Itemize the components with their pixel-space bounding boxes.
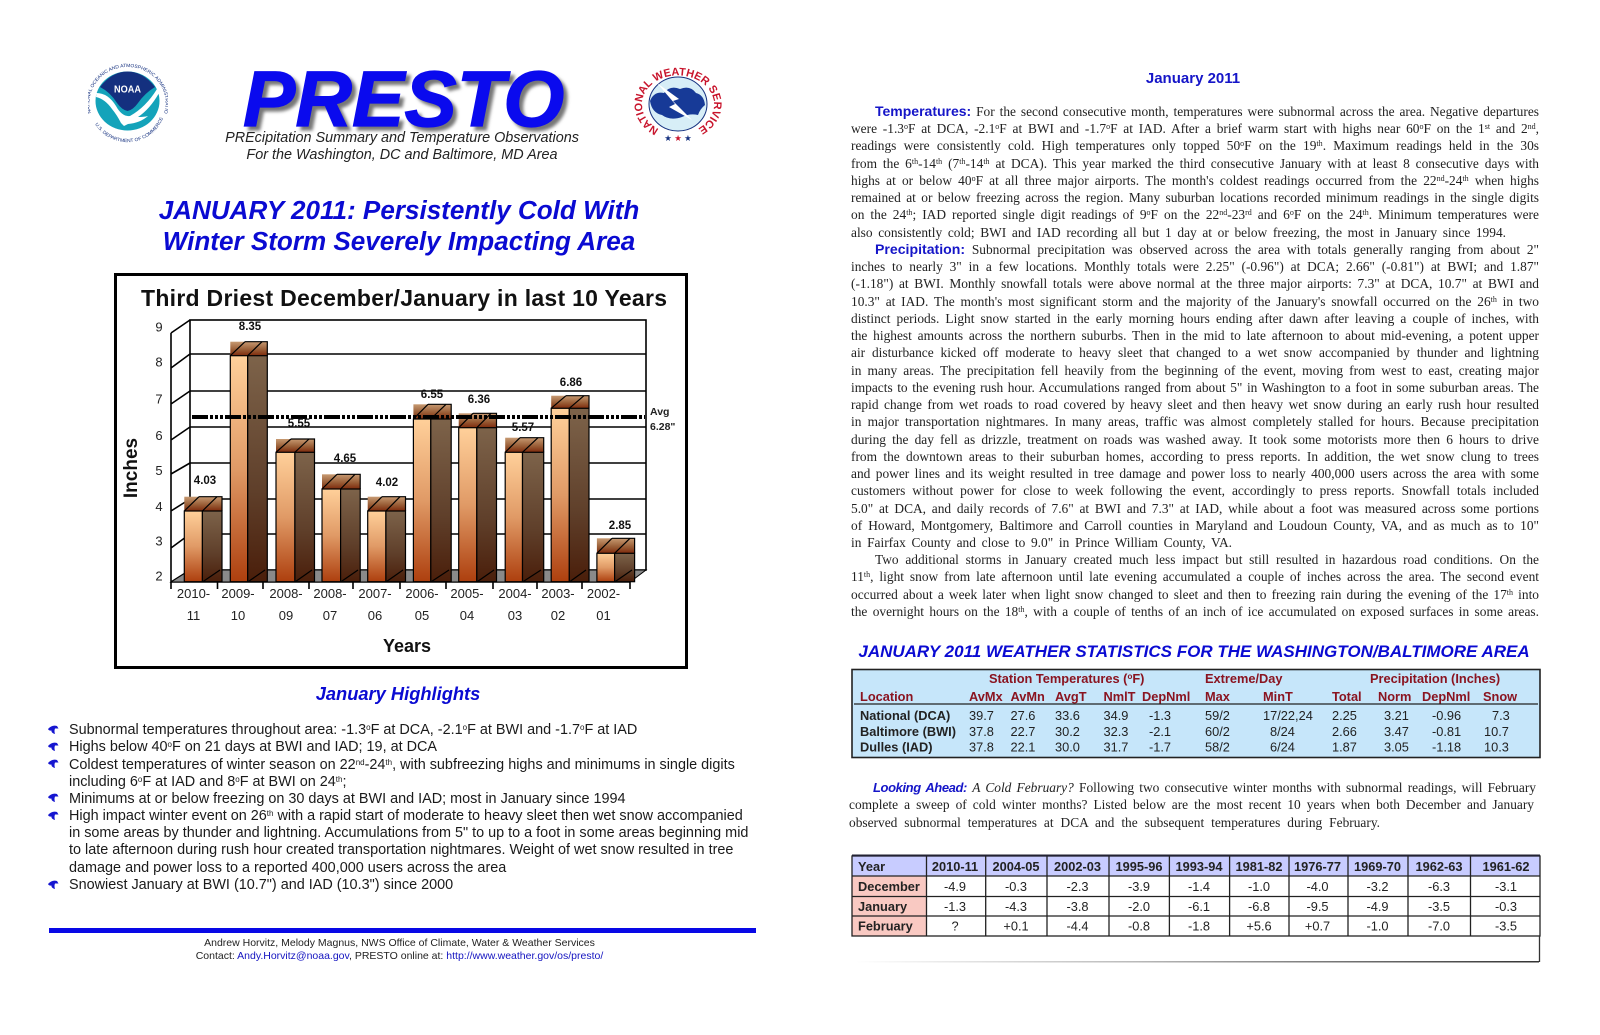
row: Dulles: 31.7 (1104, 740, 1128, 754)
row: Baltimore: -0.81 (1432, 724, 1461, 739)
row: National: -0.96 (1432, 708, 1461, 723)
value labels: 2.85 (609, 520, 632, 532)
x axis labels: 07 (323, 608, 337, 623)
x axis labels (177, 586, 620, 623)
row: National: 7.3 (1492, 708, 1510, 723)
headline: JANUARY 2011: Persistently Cold With (159, 195, 639, 225)
article text: of Howard, Montgomery, Baltimore and Carroll counties in Maryland and Loudoun County, VA, and as much as to 10" (851, 518, 1539, 533)
group headers: F) (1132, 671, 1144, 686)
y axis labels: 5 (155, 463, 163, 478)
row: December: -1.0 (1248, 879, 1270, 894)
heading: January Highlights: January Highlights (316, 683, 480, 704)
chart title: Third Driest December/January in last 10 Years (141, 285, 667, 311)
column headers: Max (1205, 689, 1231, 704)
row: December: -4.0 (1306, 879, 1329, 894)
looking ahead text: complete a sweep of cold winter months? Listed below are the most recent 10 years when both December and January (849, 797, 1534, 812)
row: February: +0.1 (1003, 918, 1029, 934)
row: December: -1.4 (1188, 879, 1210, 894)
article text: inches to nearly 3" in a few locations. Monthly totals were 2.25" (-0.96") at DCA; 2.66" (-0.81") at BWI; and 1.87" (851, 259, 1539, 274)
row: Baltimore: 8/24 (1270, 724, 1295, 739)
article text: distinct periods. Light snow started in the early morning hours ending after dawn after leaving a couple of inches, with (851, 311, 1539, 326)
row: Baltimore: 2.66 (1332, 724, 1357, 739)
bullet icon (48, 812, 58, 820)
row: Dulles: 30.0 (1055, 740, 1080, 754)
row: February: -4.4 (1066, 918, 1089, 934)
bullet list: Snowiest January at BWI (10.7") and IAD (10.3") since 2000 (69, 876, 453, 892)
article text: on the 24th; IAD reported single digit readings of 9oF on the 22nd-23rd and 6oF on the 24th. Minimum temperatures were (851, 207, 1539, 222)
article text: (-1.18") at BWI. Monthly snowfall totals were above normal at the three major airports: 7.3" at DCA, 10.7" at BWI and (851, 276, 1539, 291)
grid and axes (171, 320, 646, 589)
looking ahead text (849, 780, 1536, 830)
row: Dulles: -1.7 (1149, 740, 1171, 754)
y axis labels: 6 (155, 428, 163, 443)
row: Baltimore: 30.2 (1055, 724, 1080, 739)
column headers: AvMx (969, 689, 1004, 704)
row: Dulles: 10.3 (1484, 740, 1509, 754)
bullet list: to late afternoon during rush hour created transportation nightmares. Weight of wet snow resulted in tree (69, 842, 733, 858)
row: December: December (858, 879, 920, 894)
average label: Avg (650, 406, 669, 418)
x axis labels: 09 (279, 608, 293, 623)
article text: air disturbance kicked off moderate to heavy sleet that changed to a wet snow accompanied by thunder and lightning (851, 345, 1539, 360)
headline (159, 195, 639, 256)
value labels: 6.86 (560, 377, 582, 389)
article text: 10.3" at IAD. The month's most significant storm and the majority of the January's snowfall occurred on the 26th in two (851, 294, 1539, 309)
y axis labels: 2 (155, 568, 163, 584)
x axis labels: 2004- (498, 586, 532, 601)
bullet list: Minimums at or below freezing on 30 days at BWI and IAD; most in January since 1994 (69, 790, 626, 806)
row: December: -4.9 (944, 879, 966, 894)
x axis labels: 2008- (313, 586, 347, 601)
row: National: 27.6 (1010, 708, 1035, 723)
bullet list: damage and power loss to a reported 400,000 users across the area (69, 860, 506, 876)
value labels: 6.36 (468, 394, 490, 406)
row: Baltimore: -2.1 (1149, 724, 1171, 739)
column headers: MinT (1263, 689, 1293, 704)
article text: Precipitation: Subnormal precipitation was observed across the area with totals generally ranging from about 2" (875, 241, 1539, 257)
x axis labels: 04 (460, 608, 474, 623)
header row: 1993-94 (1176, 859, 1223, 874)
row: December: -6.3 (1428, 879, 1450, 894)
x axis labels: 2005- (450, 586, 484, 601)
x axis labels: 2009- (221, 586, 255, 601)
article text: impacts to the evening rush hour. Accumulations ranged from about 5" in Washington to a foot in some suburban areas. The (851, 380, 1539, 395)
column headers: DepNml (1142, 689, 1190, 704)
x axis labels: 2002- (587, 586, 620, 601)
subtitle: For the Washington, DC and Baltimore, MD Area (246, 146, 558, 162)
row: January: -1.3 (944, 899, 966, 914)
row: February: +0.7 (1305, 918, 1330, 934)
bullet list: Subnormal temperatures throughout area: -1.3oF at DCA, -2.1oF at BWI and -1.7oF at IAD (69, 722, 637, 738)
bullet list: including 6oF at IAD and 8oF at BWI on 24th; (69, 774, 346, 790)
row: Dulles: Dulles (IAD) (860, 740, 933, 754)
row: Dulles: 3.05 (1384, 740, 1409, 754)
subtitle (225, 130, 579, 162)
x axis labels: 2008- (269, 586, 303, 601)
row: Baltimore (860, 724, 1509, 739)
x axis labels: 01 (596, 608, 611, 623)
row: January: -3.5 (1428, 899, 1450, 914)
row: January: -4.9 (1366, 899, 1389, 914)
header row: 1969-70 (1354, 859, 1401, 874)
bar chart: Third Driest December/January (114, 273, 688, 669)
article text: during the day fell as drizzle, treatment on roads was washed away. It took some motorists more then 6 hours to drive (851, 432, 1539, 447)
column headers: AvgT (1055, 689, 1087, 704)
row: January (858, 899, 1517, 914)
row: National: 59/2 (1205, 708, 1230, 723)
article text: from the downtown areas to their suburban homes, according to press reports. In addition, the wet snow clung to trees (851, 449, 1539, 464)
header row: 2010-11 (932, 859, 978, 874)
column headers: Location (860, 689, 914, 704)
article text: rapid change from wet roads to road covered by heavy sleet and then heavy wet snow during an early rush hour resulted (851, 397, 1539, 412)
column headers: Snow (1483, 689, 1517, 704)
group headers (989, 671, 1500, 686)
bars (184, 342, 635, 582)
row: National: 3.21 (1384, 708, 1409, 723)
y axis labels: 7 (155, 392, 163, 406)
x axis labels: 2010- (177, 586, 210, 601)
row: January: -2.0 (1128, 899, 1150, 914)
y axis title: Inches (121, 438, 142, 498)
row: December: -2.3 (1066, 879, 1089, 894)
column headers: Norm (1378, 689, 1411, 704)
row: Baltimore: 22.7 (1010, 724, 1035, 739)
footer credits (196, 936, 604, 962)
footer credits: Andrew Horvitz, Melody Magnus, NWS Office of Climate, Water & Weather Services (204, 936, 595, 948)
row: December: -3.2 (1366, 879, 1389, 894)
group headers: o (1127, 672, 1132, 681)
row: National: -1.3 (1149, 708, 1171, 723)
article text: 11th, light snow from late afternoon until late evening accumulated a couple of inches across the area. The second event (851, 569, 1539, 584)
bullet list: in some areas by thunder and lightning. Accumulations from 5" to up to a foot in some areas beginning mid (69, 825, 748, 841)
group headers: Precipitation (Inches) (1370, 671, 1500, 686)
row: February: -1.0 (1366, 918, 1389, 934)
row: National: 34.9 (1104, 708, 1128, 723)
value labels: 6.55 (421, 389, 444, 401)
row: Dulles (860, 740, 1509, 754)
row: Baltimore: 37.8 (969, 724, 994, 739)
article text: customers without power for close to week following the event, accordingly to press reports. Snowfall totals included (851, 483, 1539, 498)
row: Dulles: -1.18 (1432, 740, 1461, 754)
logo: NOAA: U.S. DEPARTMENT OF COMMERCE (96, 117, 163, 142)
row: Baltimore: 3.47 (1384, 724, 1409, 739)
logo: National Weather Service: NATIONAL WEATHER SERVICE (634, 68, 722, 136)
row: Dulles: 6/24 (1270, 740, 1295, 754)
article text: also consistently cold; BWI and IAD recording all but 1 day at or below freezing, the most in January since 1994. (851, 225, 1506, 240)
x axis labels: 2003- (541, 586, 575, 601)
row: Dulles: 22.1 (1010, 740, 1035, 754)
article text (851, 103, 1539, 619)
logo: NOAA (88, 64, 168, 142)
value labels: 5.55 (288, 418, 311, 430)
article text: in many areas. The precipitation fell heavily from the beginning of the event, moving from west to east, creating major (851, 363, 1539, 378)
bullet list: Highs below 40oF on 21 days at BWI and IAD; 19, at DCA (69, 739, 437, 755)
row: December (858, 879, 1517, 894)
logo: National Weather Service: ★ ★ ★ (664, 133, 692, 143)
bullet icon (48, 880, 58, 889)
article text: were -1.3oF at DCA, -2.1oF at BWI and -1.7oF at IAD. After a brief warm start with highs near 60oF on the 1st and 2nd, (851, 121, 1539, 136)
row: January: -4.3 (1005, 899, 1027, 914)
x axis title: Years (383, 636, 431, 656)
row: January: January (858, 899, 908, 914)
row: February: -1.8 (1188, 918, 1210, 934)
article text: Two additional storms in January created much less impact but still resulted in hazardous road conditions. On the (875, 552, 1539, 567)
article text: and power lines and its weight resulted in tree damage and power loss to nearly 400,000 users across the area with some (851, 466, 1539, 481)
row: December: -3.1 (1495, 879, 1517, 894)
row: Baltimore: 10.7 (1484, 724, 1509, 739)
value labels: 4.02 (376, 477, 398, 489)
row: National: 2.25 (1332, 708, 1357, 723)
article text: the highest amounts across the northern suburbs. Then in the mid to late afternoon to about mid-evening, a potent upper (851, 328, 1539, 343)
footer credits: Contact: Andy.Horvitz@noaa.gov, PRESTO online at: http://www.weather.gov/os/presto/ (196, 950, 603, 962)
header row: 1961-62 (1483, 859, 1529, 874)
header row: 1976-77 (1294, 859, 1341, 874)
article text: the overnight hours on the 18th, with a couple of tenths of an inch of ice accumulated on exposed surfaces in some areas. (851, 604, 1539, 619)
x axis labels: 03 (508, 608, 522, 623)
value labels: 5.57 (512, 422, 534, 434)
row: January: -6.8 (1248, 899, 1270, 914)
x axis labels: 10 (231, 608, 245, 623)
y axis labels: 4 (155, 499, 163, 514)
bullet icon (48, 760, 58, 768)
group headers: Station Temperatures ( (989, 671, 1127, 686)
row: January: -6.1 (1188, 899, 1210, 914)
header row (858, 859, 1529, 874)
article text: highs at or below 40oF at all three major airports. The month's coldest readings occurred from the 22nd-24th when highs (851, 173, 1539, 188)
header row: 1981-82 (1236, 859, 1282, 874)
article text: Temperatures: For the second consecutive month, temperatures were subnormal across the area. Negative departures (875, 103, 1539, 119)
article text: from the 6th-14th (7th-14th at DCA). This year marked the third consecutive January with at least 8 consecutive days with (851, 156, 1539, 171)
subtitle: PREcipitation Summary and Temperature Observations (225, 130, 579, 146)
row: February: -3.5 (1495, 918, 1517, 934)
heading: January 2011: January 2011 (1146, 70, 1240, 87)
row: February: +5.6 (1246, 918, 1272, 934)
x axis labels: 05 (415, 608, 429, 623)
blue divider (49, 928, 756, 933)
bullet icon (48, 726, 58, 734)
looking ahead text: Looking Ahead: A Cold February? Following two consecutive winter months with subnormal readings, will February (873, 780, 1536, 795)
value labels (194, 321, 632, 532)
y axis labels: 9 (155, 320, 163, 334)
header row: Year (858, 859, 885, 874)
row: Baltimore: 60/2 (1205, 724, 1230, 739)
x axis labels: 02 (551, 608, 565, 623)
article text: 5.0" at DCA, and daily records of 7.6" at BWI and 7.3" at IAD, while about a foot was measured across some portions (851, 501, 1539, 516)
x axis labels: 11 (187, 608, 200, 623)
bullet icon (48, 742, 58, 751)
row: February: February (858, 918, 914, 934)
row: Baltimore: 32.3 (1104, 724, 1128, 739)
row: December: -0.3 (1005, 879, 1027, 894)
column headers: NmlT (1104, 689, 1136, 704)
row: Dulles: 58/2 (1205, 740, 1230, 754)
row: Dulles: 1.87 (1332, 740, 1357, 754)
row: National (860, 708, 1510, 723)
header row: 1962-63 (1416, 859, 1462, 874)
bullet icon (48, 794, 58, 802)
article text: readings were consistently cold. High temperatures only topped 50oF on the 19th. Maximum readings held in the 30s (851, 138, 1539, 153)
looking ahead text: observed subnormal temperatures at DCA and the subsequent temperatures during February. (849, 815, 1380, 830)
table: station statistics (851, 668, 1541, 758)
x axis labels: 2007- (358, 586, 392, 601)
row: December: -3.9 (1128, 879, 1150, 894)
article text: remained at or below freezing across the region. Many suburban locations recorded minimum readings in the single digits (851, 190, 1539, 205)
article text: occurred about a week later when light snow changed to sleet and then to freezing rain during the evening of the 17th into (851, 587, 1539, 602)
row: National: 17/22,24 (1263, 708, 1313, 723)
column headers: DepNml (1422, 689, 1470, 704)
group headers: Extreme/Day (1205, 671, 1283, 686)
y axis labels: 3 (155, 534, 163, 548)
headline: Winter Storm Severely Impacting Area (163, 226, 635, 256)
row: January: -3.8 (1066, 899, 1089, 914)
value labels: 8.35 (239, 321, 262, 333)
row: January: -0.3 (1495, 899, 1517, 914)
article text: in major transportation nightmares. In many areas, traffic was almost completely stalled for hours. Because precipitation (851, 414, 1539, 429)
bullet list (48, 722, 748, 892)
x axis labels: 2006- (405, 586, 439, 601)
column headers (860, 689, 1517, 704)
header row: 2002-03 (1054, 859, 1101, 874)
row: National: 39.7 (969, 708, 994, 723)
logo: NOAA: NOAA (114, 84, 141, 96)
heading: weather statistics: JANUARY 2011 WEATHER STATISTICS FOR THE WASHINGTON/BALTIMORE AREA (858, 642, 1530, 661)
table: February history (851, 854, 1541, 962)
article text: in Fairfax County and close to 9.0" in Prince William County, VA. (851, 535, 1232, 550)
average line (192, 415, 645, 419)
row: February: ? (951, 918, 959, 934)
bullet list: Coldest temperatures of winter season on 22nd-24th, with subfreezing highs and minimums in single digits (69, 756, 735, 772)
row: Dulles: 37.8 (969, 740, 994, 754)
y axis labels (155, 320, 163, 584)
row: January: -9.5 (1306, 899, 1329, 914)
x axis labels: 06 (368, 608, 382, 623)
row: National: 33.6 (1055, 708, 1080, 723)
value labels: 4.03 (194, 475, 216, 487)
header row: 1995-96 (1116, 859, 1162, 874)
column headers: AvMn (1010, 689, 1045, 704)
row: National: National (DCA) (860, 708, 950, 723)
bullet list: High impact winter event on 26th with a rapid start of moderate to heavy sleet then wet snow accompanied (69, 808, 743, 824)
row: February: -0.8 (1128, 918, 1150, 934)
header row: 2004-05 (993, 859, 1039, 874)
average label: 6.28" (650, 421, 675, 433)
row: February: -7.0 (1428, 918, 1450, 934)
row: February (858, 918, 1517, 934)
row: Baltimore: Baltimore (BWI) (860, 724, 956, 739)
y axis labels: 8 (155, 354, 163, 370)
column headers: Total (1332, 689, 1362, 704)
value labels: 4.65 (334, 453, 357, 465)
